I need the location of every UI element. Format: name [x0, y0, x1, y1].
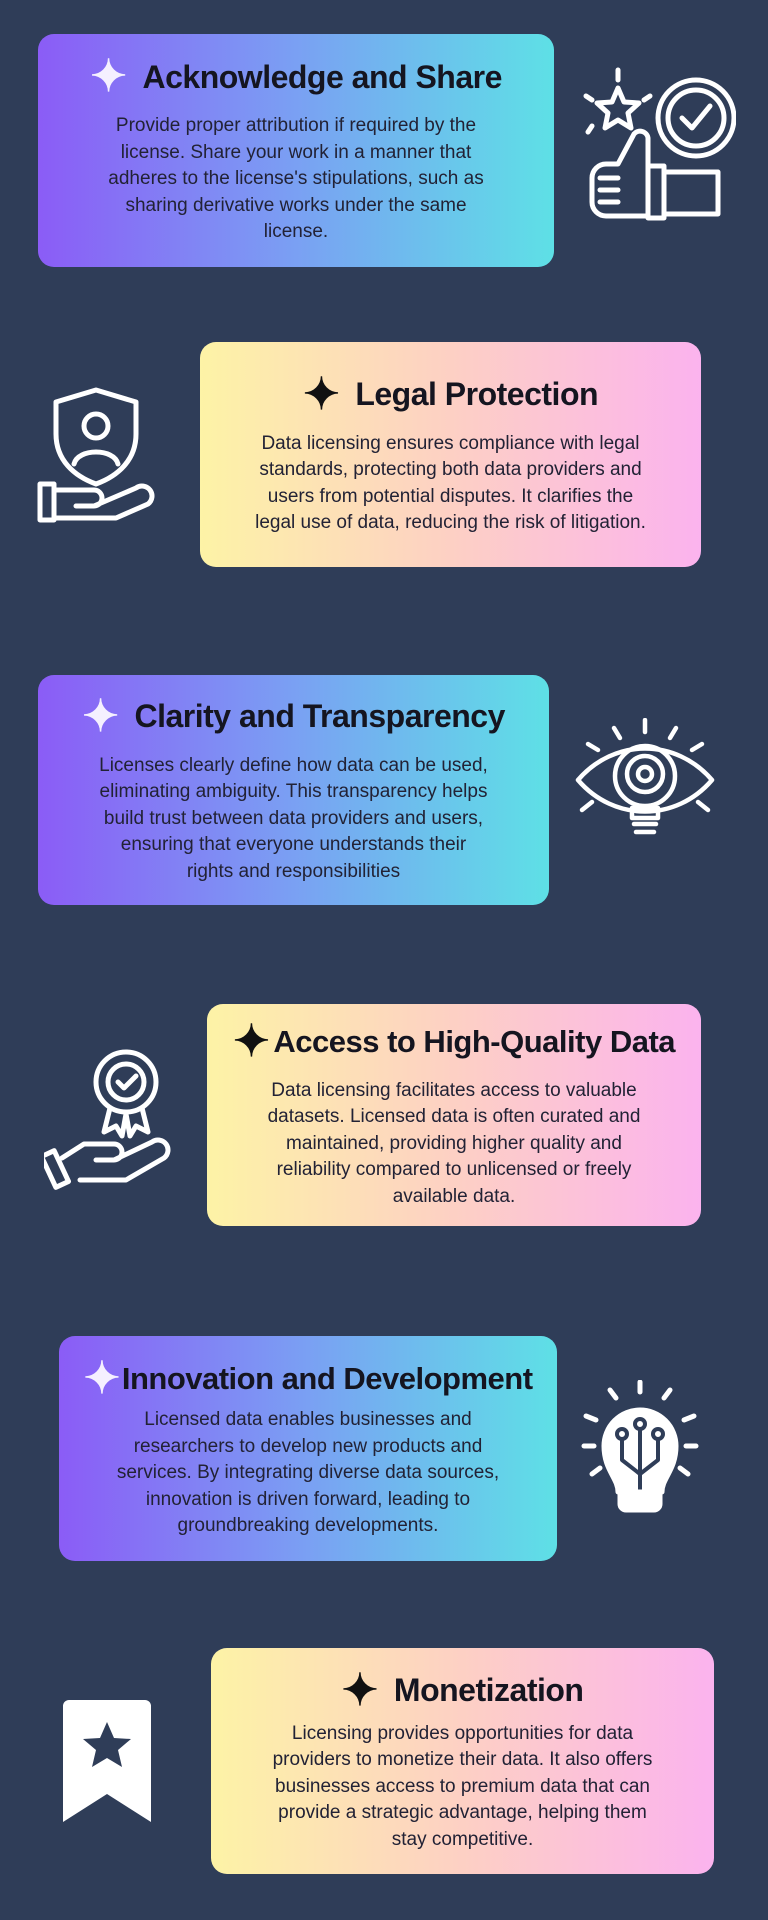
icon: thumbs up star check: [584, 68, 736, 220]
heading: [233, 1017, 676, 1066]
text block: reliability compared to unlicensed or freely: [277, 1159, 631, 1180]
text block: legal use of data, reducing the risk of litigation.: [255, 512, 646, 533]
heading: Innovation and Development: [122, 1361, 533, 1396]
text block: license.: [264, 221, 328, 242]
text block: maintained, providing higher quality and: [286, 1133, 622, 1154]
panel: innovation and development: [59, 1336, 557, 1561]
icon: eye bulb: [576, 718, 714, 834]
panel: legal protection: [200, 342, 701, 567]
icon: bookmark star: [63, 1700, 151, 1822]
text block: services. By integrating diverse data sources,: [117, 1462, 499, 1483]
text block: provide a strategic advantage, helping them: [278, 1802, 647, 1823]
text block: businesses access to premium data that can: [275, 1776, 650, 1797]
heading: ✦: [83, 1354, 120, 1403]
text block: [117, 1409, 499, 1536]
text block: Data licensing facilitates access to valuable: [271, 1080, 637, 1101]
text block: [108, 115, 484, 242]
text block: Licenses clearly define how data can be used,: [99, 755, 488, 776]
heading: Monetization: [394, 1672, 583, 1708]
icon: circuit bulb: [582, 1380, 698, 1512]
text block: groundbreaking developments.: [178, 1515, 438, 1536]
text block: license. Share your work in a manner that: [121, 142, 471, 163]
text block: [255, 432, 646, 533]
heading: [342, 1666, 583, 1715]
heading: [90, 52, 502, 101]
heading: Access to High-Quality Data: [273, 1024, 675, 1059]
text block: ensuring that everyone understands their: [121, 834, 466, 855]
text block: Licensing provides opportunities for data: [292, 1723, 633, 1744]
heading: [303, 370, 598, 418]
text block: [273, 1723, 652, 1850]
text block: available data.: [393, 1186, 515, 1207]
text block: innovation is driven forward, leading to: [146, 1489, 470, 1510]
panel: clarity and transparency: [38, 675, 549, 905]
heading: ✦: [82, 692, 118, 741]
text block: stay competitive.: [392, 1829, 533, 1850]
panel: monetization: [211, 1648, 714, 1874]
text block: users from potential disputes. It clarifies the: [268, 486, 633, 506]
text block: [268, 1080, 640, 1207]
text block: rights and responsibilities: [187, 861, 400, 882]
text block: researchers to develop new products and: [134, 1436, 482, 1457]
heading: Acknowledge and Share: [142, 59, 502, 95]
heading: ✦: [233, 1017, 269, 1066]
text block: sharing derivative works under the same: [125, 195, 467, 216]
icon: award hand: [44, 1050, 170, 1190]
text block: eliminating ambiguity. This transparency helps: [100, 781, 487, 802]
text block: Licensed data enables businesses and: [144, 1409, 472, 1430]
text block: Data licensing ensures compliance with legal: [261, 432, 640, 454]
text block: adheres to the license's stipulations, such as: [108, 168, 484, 189]
heading: Clarity and Transparency: [134, 698, 505, 734]
panel: acknowledge and share: [38, 34, 554, 267]
text block: [99, 755, 488, 882]
heading: ✦: [303, 370, 339, 418]
text block: standards, protecting both data providers and: [259, 459, 642, 480]
panel: access to high-quality data: [207, 1004, 701, 1226]
text block: providers to monetize their data. It also offers: [273, 1749, 652, 1770]
text block: datasets. Licensed data is often curated and: [268, 1106, 640, 1127]
heading: Legal Protection: [355, 376, 598, 412]
heading: ✦: [90, 52, 126, 101]
text block: build trust between data providers and users,: [104, 808, 483, 829]
heading: ✦: [342, 1666, 378, 1715]
icon: shield hand: [38, 388, 154, 522]
heading: [82, 692, 506, 741]
text block: Provide proper attribution if required by the: [116, 115, 476, 136]
heading: [83, 1354, 533, 1403]
